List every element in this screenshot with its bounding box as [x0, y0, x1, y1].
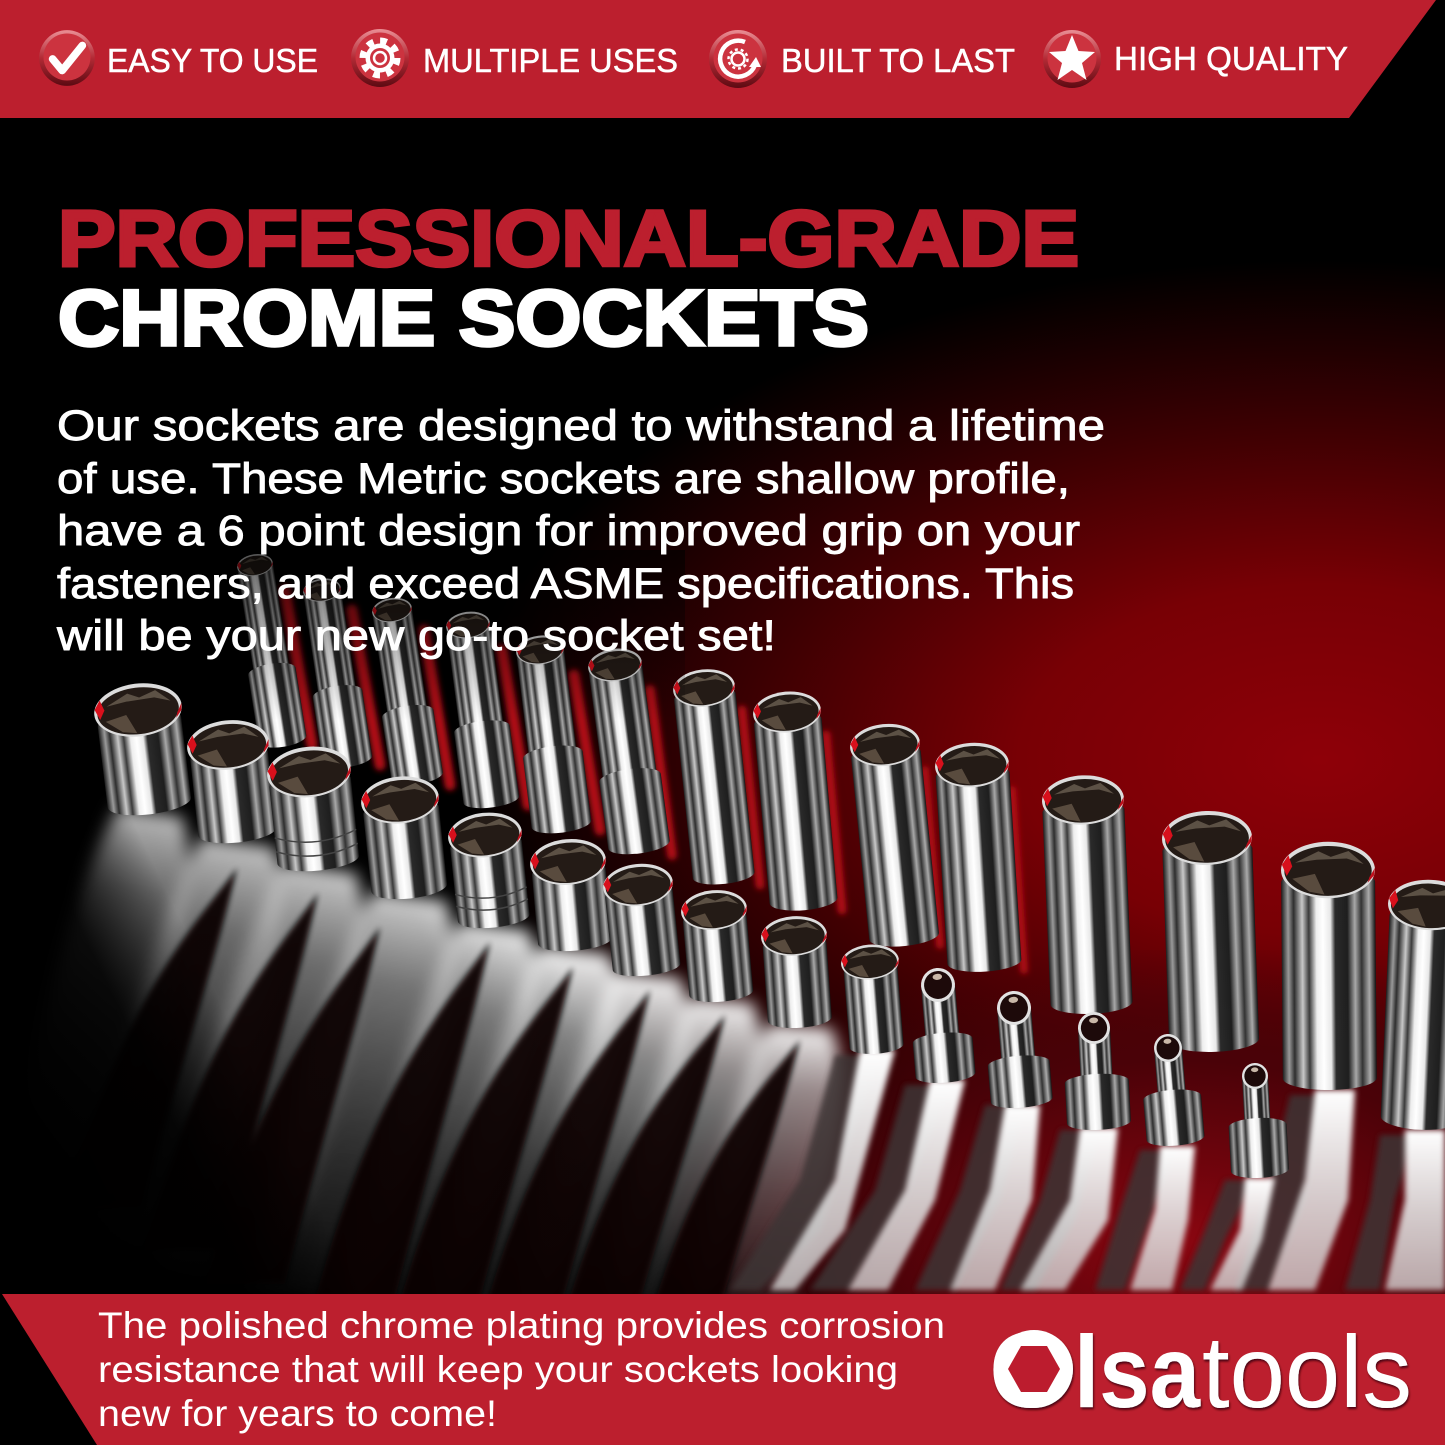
deep socket 3 [364, 594, 444, 788]
logo: Olsatools: tools [1202, 1315, 1412, 1429]
deep socket 12 [1161, 809, 1259, 1053]
body text block: fasteners, and exceed ASME specifications. This [57, 560, 1074, 608]
label: high quality: HIGH QUALITY [1114, 40, 1348, 77]
red reflections behind deep sockets [285, 590, 1024, 970]
corrosion resistance text: new for years to come! [98, 1393, 497, 1434]
heading line 2: CHROME SOCKETS [58, 273, 869, 362]
shallow socket 1 [91, 678, 194, 820]
shallow socket 15 [1225, 1062, 1289, 1179]
brushed metal floor with light fans [0, 799, 1445, 1335]
shadow falloff on the left of the floor [0, 800, 1100, 1294]
heading line 1: PROFESSIONAL-GRADE [58, 194, 1079, 282]
shallow socket 7 [601, 860, 682, 979]
icon: circular arrow gear button [709, 30, 767, 88]
shallow socket 13 [1061, 1010, 1131, 1132]
logo: Olsatools: O [989, 1309, 1073, 1430]
logo: Olsatools [989, 1309, 1412, 1430]
body text block: have a 6 point design for improved grip on your [57, 507, 1080, 555]
shallow socket 12 [982, 988, 1053, 1110]
logo: Olsatools: lsa [1074, 1315, 1201, 1429]
shallow socket 14 [1138, 1032, 1205, 1148]
deep socket 5 [508, 632, 592, 836]
icon: check mark button [39, 30, 95, 86]
label: built to last: BUILT TO LAST [781, 42, 1015, 79]
deep socket 10 [934, 741, 1022, 974]
shallow socket 9 [760, 914, 833, 1030]
front row of shallow chrome sockets [91, 678, 1289, 1179]
bright streaks on the right of the floor [770, 1050, 1445, 1290]
gray shadow bands beside the right streaks [730, 1055, 1415, 1290]
bottom banner [2, 1294, 1445, 1445]
deep socket 6 [582, 645, 671, 857]
deep socket 2 [296, 575, 373, 771]
shallow socket 3 [265, 743, 361, 875]
deep socket 13 [1281, 841, 1377, 1090]
body text block: of use. These Metric sockets are shallow profile, [57, 455, 1070, 503]
corrosion resistance text: The polished chrome plating provides corrosion [98, 1305, 945, 1346]
shallow socket 11 [907, 966, 976, 1085]
shallow socket 4 [359, 773, 449, 903]
corrosion resistance text: resistance that will keep your sockets looking [98, 1349, 898, 1390]
shallow socket 6 [528, 836, 614, 954]
shallow socket 10 [840, 942, 906, 1056]
icon: star button [1043, 30, 1101, 88]
icon: gear button [351, 29, 409, 87]
body text block: will be your new go-to socket set! [56, 612, 776, 660]
heading [58, 194, 1079, 362]
label: multiple uses: MULTIPLE USES [423, 42, 678, 79]
back row of deep chrome sockets [225, 550, 1445, 1132]
deep socket 1 [230, 551, 307, 750]
label: easy to use: EASY TO USE [107, 42, 318, 79]
top banner [0, 0, 1436, 118]
deep socket 4 [439, 608, 520, 811]
deep socket 7 [671, 666, 755, 887]
corrosion resistance text [98, 1305, 945, 1434]
banner shape [0, 0, 1436, 118]
deep socket 9 [848, 721, 940, 949]
shallow socket 2 [185, 716, 279, 847]
dimming over the far socket tops [225, 550, 685, 720]
deep socket 14 [1378, 878, 1445, 1132]
deep socket 11 [1041, 774, 1133, 1016]
shallow socket 8 [679, 887, 755, 1005]
body text block [56, 402, 1105, 660]
shallow socket 5 [446, 809, 532, 931]
body text block: Our sockets are designed to withstand a lifetime [57, 402, 1105, 450]
banner shape [2, 1294, 1445, 1445]
deep socket 8 [751, 689, 838, 913]
